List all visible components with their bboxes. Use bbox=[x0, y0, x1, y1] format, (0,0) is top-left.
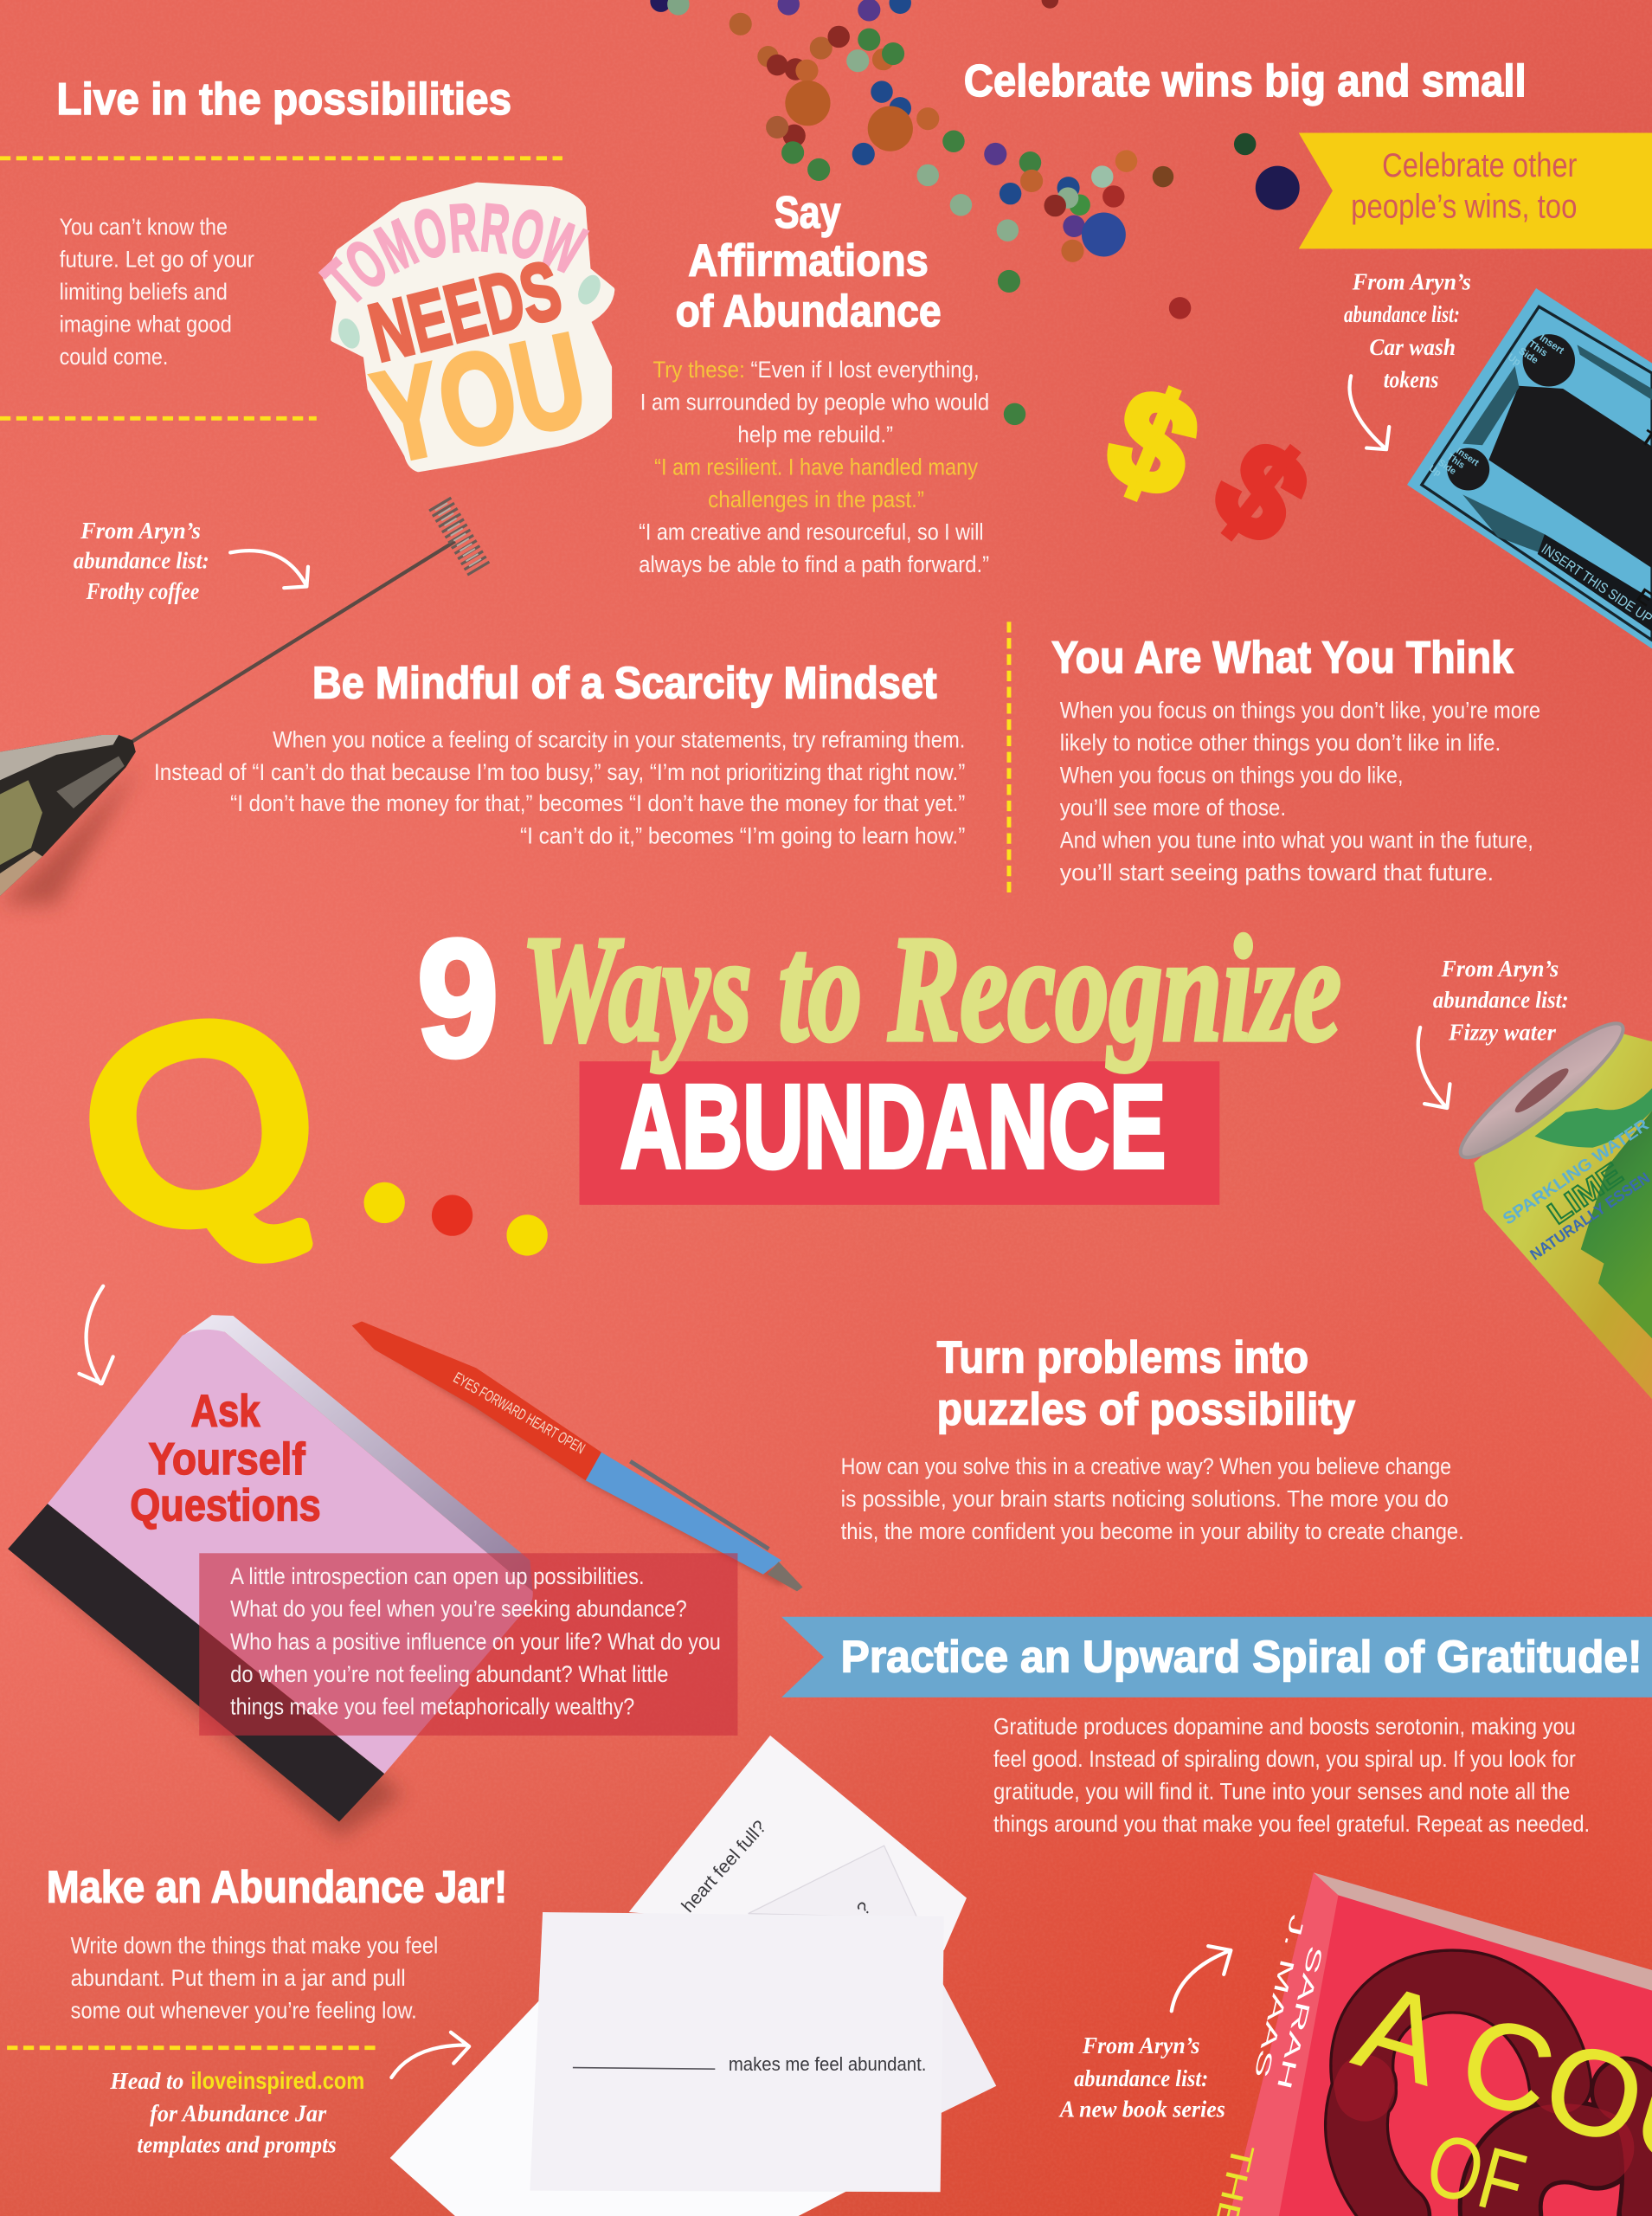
arrow: to frother bbox=[230, 551, 308, 588]
sticker: tomorrow needs you bbox=[318, 182, 614, 491]
body: affirmations: challenges in the past.” bbox=[708, 486, 924, 512]
photo: book: THE bbox=[1207, 2141, 1262, 2216]
photo: blue car wash token ticket: This bbox=[1445, 452, 1467, 471]
heading: Live in the possibilities bbox=[56, 74, 511, 125]
note: new book series: From Aryn’s bbox=[1082, 2032, 1199, 2059]
translucent panel bbox=[199, 1553, 737, 1736]
arrow: to tokens bbox=[1350, 376, 1389, 449]
photo: book: J. MAAS bbox=[1250, 1912, 1309, 2080]
section: abundance jar bbox=[7, 1863, 507, 2159]
photo: blue car wash token ticket bbox=[1407, 288, 1652, 648]
note: frothy coffee: From Aryn’s bbox=[80, 518, 201, 544]
body text: Who has a positive influence on your life? What do you bbox=[230, 1628, 721, 1654]
body text: imagine what good bbox=[60, 312, 232, 338]
body text: is possible, your brain starts noticing solutions. The more you do bbox=[841, 1485, 1449, 1511]
body: affirmations: “I am creative and resourceful, so I will bbox=[639, 519, 984, 545]
body text: When you focus on things you do like, bbox=[1060, 762, 1404, 788]
arrow: to cards bbox=[391, 2032, 469, 2078]
body: affirmations: help me rebuild.” bbox=[737, 422, 893, 448]
note: fizzy water: abundance list: bbox=[1433, 987, 1569, 1014]
photo: blue car wash token ticket: This bbox=[1527, 339, 1549, 359]
note: frothy coffee: abundance list: bbox=[74, 547, 209, 574]
heading: Celebrate wins big and small bbox=[964, 56, 1527, 106]
section: celebrate wins bbox=[964, 56, 1652, 248]
body text: limiting beliefs and bbox=[60, 279, 228, 305]
body: affirmations: always be able to find a path forward.” bbox=[639, 551, 989, 577]
photo: book bbox=[1207, 1872, 1652, 2216]
note: fizzy water: Fizzy water bbox=[1448, 1020, 1556, 1047]
body text bbox=[60, 214, 254, 370]
body text: some out whenever you’re feeling low. bbox=[71, 1997, 417, 2023]
photo: pen bbox=[352, 1322, 803, 1591]
heading: Affirmations bbox=[688, 235, 929, 286]
body text bbox=[154, 727, 965, 849]
arrow: to can bbox=[1418, 1027, 1450, 1108]
body text bbox=[230, 1563, 721, 1719]
body text bbox=[993, 1713, 1590, 1837]
title number 9: 9 bbox=[417, 905, 498, 1092]
photo: abundance cards: makes me feel abundant. bbox=[729, 2053, 926, 2075]
title block bbox=[417, 905, 1341, 1205]
body text: this, the more confident you become in your ability to create change. bbox=[841, 1518, 1464, 1544]
note: car wash tokens bbox=[1344, 269, 1471, 393]
heading: Ask bbox=[190, 1386, 260, 1436]
photo: sparkling water can: LIME bbox=[1541, 1156, 1629, 1231]
body text: future. Let go of your bbox=[60, 247, 254, 273]
heading: Yourself bbox=[148, 1434, 305, 1485]
body text: gratitude, you will find it. Tune into your senses and note all the bbox=[993, 1778, 1570, 1804]
photo: abundance cards: ? bbox=[853, 1898, 875, 1919]
sticker: tomorrow needs you: YOU bbox=[363, 305, 598, 491]
photo: abundance cards bbox=[390, 1736, 996, 2216]
body: affirmations bbox=[639, 357, 989, 577]
heading: Be Mindful of a Scarcity Mindset bbox=[312, 659, 937, 709]
heading: Questions bbox=[130, 1481, 321, 1531]
section: you are what you think bbox=[1051, 633, 1540, 886]
body text bbox=[71, 1932, 438, 2023]
note: new book series: A new book series bbox=[1058, 2097, 1225, 2123]
body text: And when you tune into what you want in the future, bbox=[1060, 828, 1533, 854]
body: affirmations: I am surrounded by people who would bbox=[640, 389, 989, 415]
body text: When you focus on things you don’t like, you’re more bbox=[1060, 697, 1540, 723]
photo: sparkling water can: SPARKLING WATER bbox=[1500, 1115, 1652, 1229]
heading bbox=[937, 1332, 1355, 1435]
body text: do when you’re not feeling abundant? What little bbox=[230, 1661, 668, 1687]
section: upward spiral of gratitude bbox=[781, 1617, 1652, 1837]
icon: red dollar sign: $ bbox=[1188, 412, 1335, 571]
icon: yellow letter Q: Q bbox=[55, 953, 343, 1295]
body text: You can’t know the bbox=[60, 214, 228, 240]
ribbon: celebrate other people's wins bbox=[1299, 132, 1652, 248]
heading: Turn problems into bbox=[937, 1332, 1308, 1382]
sticker: tomorrow needs you: TOMORROW bbox=[318, 203, 590, 303]
ribbon: celebrate other people's wins: people’s wins, too bbox=[1351, 188, 1577, 225]
photo: book: SARAH bbox=[1273, 1943, 1327, 2092]
heading bbox=[676, 188, 942, 337]
heading: Make an Abundance Jar! bbox=[47, 1863, 507, 1913]
body text: you’ll start seeing paths toward that future. bbox=[1060, 860, 1494, 886]
call to action: templates and prompts bbox=[137, 2132, 337, 2159]
section: live in the possibilities bbox=[0, 74, 562, 418]
heading bbox=[130, 1386, 321, 1531]
note: frothy coffee bbox=[74, 518, 209, 605]
note: car wash tokens: abundance list: bbox=[1344, 301, 1460, 328]
note: car wash tokens: Car wash bbox=[1369, 334, 1456, 361]
ribbon bbox=[781, 1617, 1652, 1697]
body text: things make you feel metaphorically wealthy? bbox=[230, 1693, 634, 1719]
body text: “I don’t have the money for that,” becomes “I don’t have the money for that yet.” bbox=[230, 790, 965, 816]
call to action bbox=[109, 2067, 364, 2159]
arrow: to book bbox=[1172, 1946, 1231, 2011]
body text: likely to notice other things you don’t like in life. bbox=[1060, 730, 1501, 756]
note: new book series: abundance list: bbox=[1074, 2065, 1208, 2092]
ribbon: celebrate other people's wins: Celebrate other bbox=[1382, 147, 1577, 184]
photo: blue car wash token ticket: Insert bbox=[1454, 446, 1481, 468]
sticker: tomorrow needs you: NEEDS bbox=[361, 244, 569, 379]
heading: Say bbox=[775, 188, 841, 238]
title script: Ways to Recognize bbox=[522, 905, 1341, 1073]
note: new book series bbox=[1058, 2032, 1225, 2123]
body text: Gratitude produces dopamine and boosts serotonin, making you bbox=[993, 1713, 1576, 1739]
section: be mindful of a scarcity mindset bbox=[154, 659, 965, 849]
call to action: for Abundance Jar bbox=[150, 2101, 326, 2128]
heading: You Are What You Think bbox=[1051, 633, 1514, 683]
body text bbox=[1060, 697, 1540, 886]
abundance label box bbox=[580, 1061, 1219, 1205]
body text: abundant. Put them in a jar and pull bbox=[71, 1965, 406, 1991]
title word: ABUNDANCE bbox=[620, 1061, 1166, 1194]
note: fizzy water bbox=[1433, 956, 1569, 1047]
photo: blue car wash token ticket: Side bbox=[1436, 457, 1458, 477]
photo: notebook bbox=[8, 1315, 533, 1837]
body text: you’ll see more of those. bbox=[1060, 795, 1286, 821]
body text: could come. bbox=[60, 344, 168, 370]
heading: of Abundance bbox=[676, 287, 942, 337]
body text: What do you feel when you’re seeking abundance? bbox=[230, 1596, 687, 1622]
arrow: to notebook bbox=[79, 1286, 113, 1383]
photo: blue car wash token ticket: Side bbox=[1517, 346, 1540, 366]
note: fizzy water: From Aryn’s bbox=[1441, 956, 1559, 982]
photo: pen: EYES FORWARD HEART OPEN bbox=[451, 1369, 588, 1458]
section: say affirmations of abundance bbox=[639, 188, 989, 577]
icon: yellow dollar sign: $ bbox=[1089, 356, 1218, 528]
body text: When you notice a feeling of scarcity in your statements, try reframing them. bbox=[273, 727, 965, 753]
note: car wash tokens: From Aryn’s bbox=[1352, 269, 1471, 296]
body text: Write down the things that make you feel bbox=[71, 1932, 438, 1958]
photo: sparkling water can bbox=[1449, 1009, 1652, 1399]
body text: How can you solve this in a creative way? When you believe change bbox=[841, 1453, 1451, 1479]
call to action: Head to bbox=[109, 2068, 183, 2095]
photo: blue car wash token ticket: Up bbox=[1506, 352, 1522, 368]
note: frothy coffee: Frothy coffee bbox=[86, 578, 199, 605]
confetti dots bbox=[650, 0, 1300, 425]
body text: things around you that make you feel grateful. Repeat as needed. bbox=[993, 1811, 1590, 1837]
body: affirmations: Try these: “Even if I lost everything, bbox=[652, 357, 980, 383]
heading: puzzles of possibility bbox=[937, 1385, 1355, 1435]
thought dots bbox=[364, 1182, 548, 1256]
section: ask yourself questions bbox=[130, 1386, 737, 1736]
body text: Instead of “I can’t do that because I’m too busy,” say, “I’m not prioritizing that right now.” bbox=[154, 759, 965, 785]
body text: A little introspection can open up possibilities. bbox=[230, 1563, 645, 1589]
photo: abundance cards: heart feel full? bbox=[678, 1817, 770, 1916]
body text bbox=[841, 1453, 1464, 1544]
photo: blue car wash token ticket: Insert bbox=[1538, 332, 1565, 357]
call to action: iloveinspired.com bbox=[190, 2067, 364, 2094]
section: turn problems into puzzles bbox=[841, 1332, 1464, 1544]
body text: feel good. Instead of spiraling down, you spiral up. If you look for bbox=[993, 1746, 1576, 1772]
body: affirmations: “I am resilient. I have handled many bbox=[654, 454, 979, 480]
body text: “I can’t do it,” becomes “I’m going to learn how.” bbox=[520, 823, 965, 849]
photo: milk frother bbox=[0, 503, 479, 905]
note: car wash tokens: tokens bbox=[1384, 366, 1438, 393]
photo: blue car wash token ticket: Up bbox=[1427, 463, 1443, 479]
